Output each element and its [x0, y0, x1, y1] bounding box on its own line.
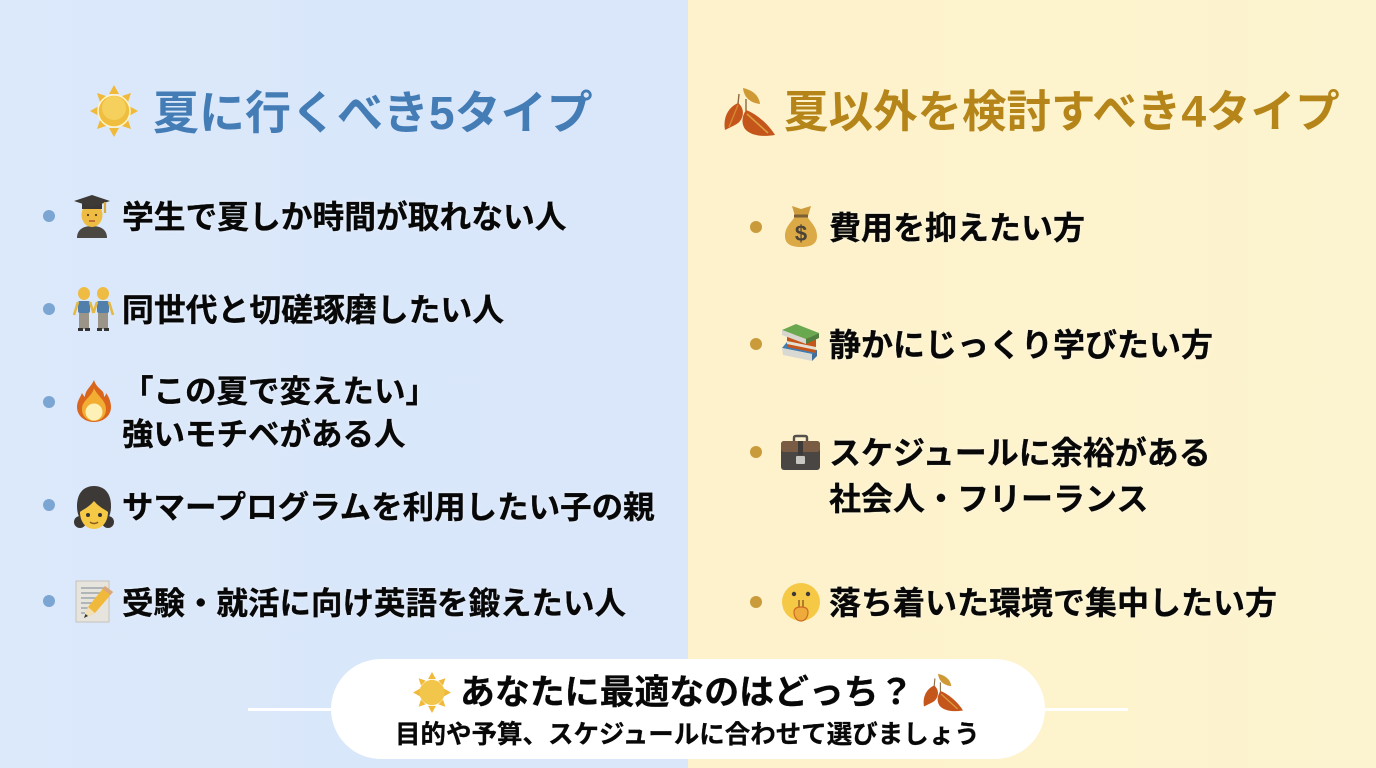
- icon: shushing face: [782, 583, 820, 622]
- item: quiet study: [750, 324, 1213, 363]
- icon: sun: [90, 85, 138, 137]
- panel: summer (left) background: [0, 0, 688, 768]
- icon: fallen leaves: [924, 674, 963, 712]
- label: 同世代と切磋琢磨したい人: [122, 292, 504, 328]
- callout question: あなたに最適なのはどっち？: [460, 673, 914, 712]
- panel: non-summer (right) background: [688, 0, 1376, 768]
- icon: two people: [72, 287, 114, 331]
- icon: briefcase: [781, 434, 820, 470]
- icon: fallen leaves: [724, 88, 775, 136]
- divider line behind callout: [248, 708, 1128, 711]
- callout: which one suits you: [331, 659, 1045, 759]
- list: non-summer types: [750, 206, 1277, 622]
- icon: graduate: [74, 195, 110, 238]
- bullet: [750, 446, 762, 458]
- label: 学生で夏しか時間が取れない人: [122, 199, 566, 235]
- bullet: [750, 596, 762, 608]
- callout subtext: 目的や予算、スケジュールに合わせて選びましょう: [395, 721, 980, 749]
- label: 静かにじっくり学びたい方: [829, 327, 1213, 363]
- icon: books: [782, 324, 819, 361]
- heading text: 夏以外を検討すべき4タイプ: [784, 88, 1340, 137]
- icon: memo: [76, 580, 113, 622]
- heading: summer: [90, 85, 593, 139]
- label line 1: スケジュールに余裕がある: [829, 435, 1211, 471]
- bullet: [43, 210, 55, 222]
- label: 費用を抑えたい方: [829, 210, 1085, 246]
- item: parent: [43, 486, 655, 529]
- item: flexible schedule: [750, 434, 1211, 517]
- icon: money bag: [785, 206, 817, 247]
- bullet: [43, 499, 55, 511]
- item: motivation: [43, 373, 437, 452]
- bullet: [43, 303, 55, 315]
- bullet: [750, 338, 762, 350]
- item: student: [43, 195, 566, 238]
- label: 受験・就活に向け英語を鍛えたい人: [122, 585, 626, 621]
- bullet: [43, 396, 55, 408]
- list: summer types: [43, 195, 655, 622]
- item: exam: [43, 580, 626, 622]
- label line 2: 社会人・フリーランス: [829, 481, 1148, 517]
- icon: girl: [74, 486, 114, 529]
- heading text: 夏に行くべき5タイプ: [153, 87, 593, 139]
- label: サマープログラムを利用したい子の親: [122, 489, 655, 525]
- item: budget: [750, 206, 1085, 247]
- icon: money bag: $: [795, 221, 807, 246]
- bullet: [750, 221, 762, 233]
- heading: non-summer: [724, 88, 1340, 137]
- label line 2: 強いモチベがある人: [122, 416, 406, 452]
- bullet: [43, 595, 55, 607]
- label: 落ち着いた環境で集中したい方: [829, 585, 1277, 621]
- item: focus environment: [750, 583, 1277, 622]
- icon: sun: [413, 672, 451, 713]
- item: peers: [43, 287, 504, 331]
- icon: fire: [77, 380, 111, 422]
- label line 1: 「この夏で変えたい」: [122, 373, 437, 409]
